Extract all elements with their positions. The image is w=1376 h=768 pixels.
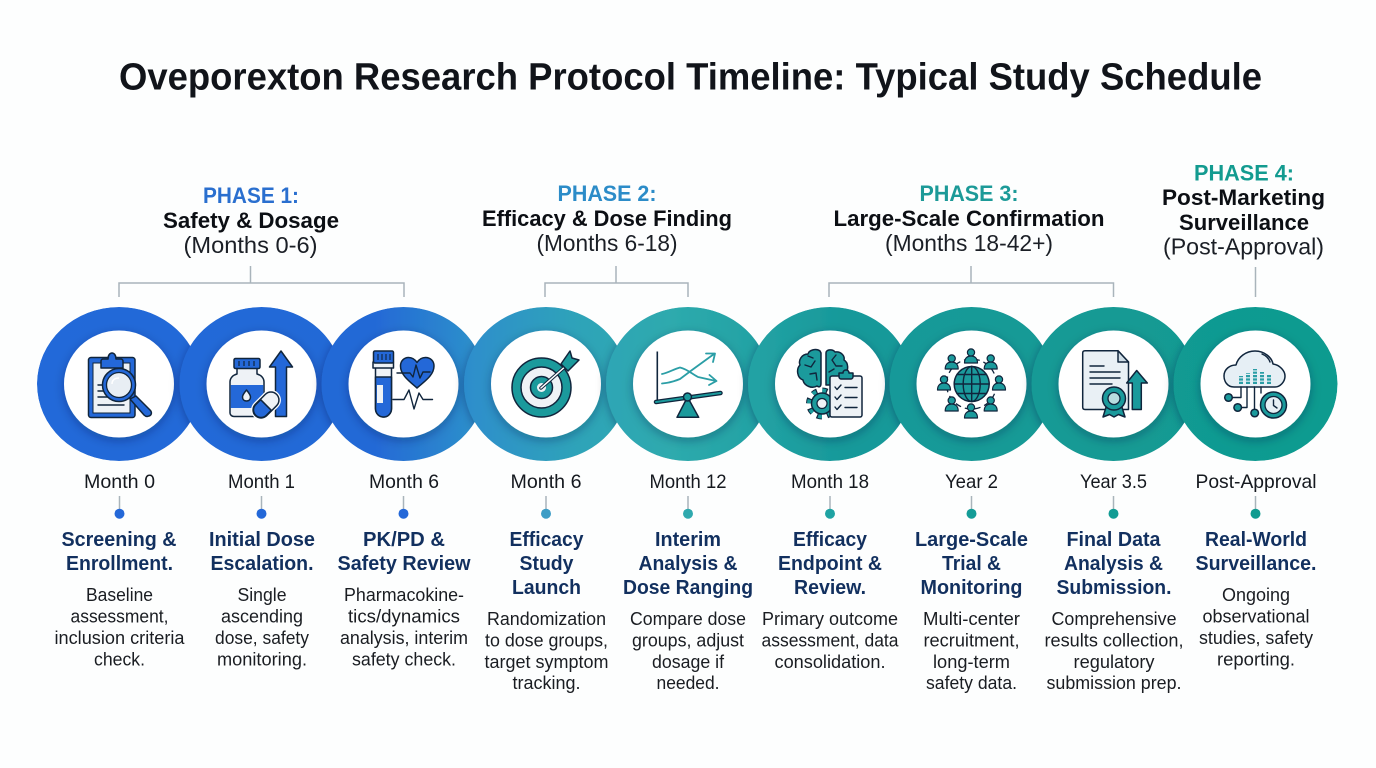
icon: globe with participants [938, 349, 1006, 418]
panel: phase 1 heading [163, 183, 339, 258]
step title: Efficacy [510, 529, 584, 551]
step description: reporting. [1217, 650, 1295, 670]
phase 2 name: Efficacy & Dose Finding [482, 206, 732, 231]
step title: Monitoring [920, 577, 1022, 599]
icon: brain, gear and checklist [798, 350, 862, 417]
step description [923, 609, 1020, 693]
step description: dose, safety [215, 628, 309, 648]
date: month 1: Month 1 [228, 471, 295, 493]
step description: studies, safety [1199, 628, 1313, 648]
step description: monitoring. [217, 650, 307, 670]
column: interim analysis and dose ranging [623, 471, 753, 693]
marker [966, 496, 976, 519]
phase 3 name: Large-Scale Confirmation [834, 206, 1104, 231]
step title: Safety Review [338, 553, 471, 575]
step description [762, 609, 899, 672]
marker [825, 496, 835, 519]
ring 4 [464, 307, 628, 461]
panel: phase 2 heading [482, 181, 732, 256]
step title: Escalation. [210, 553, 314, 575]
step title: Launch [512, 577, 581, 599]
step description: tracking. [512, 673, 580, 693]
step description [215, 585, 309, 670]
phase 4 name: Post-Marketing [1162, 185, 1325, 210]
step title [338, 529, 471, 575]
marker [1108, 496, 1118, 519]
step title: Analysis & [638, 553, 738, 575]
step title: Final Data [1066, 529, 1161, 551]
marker [114, 496, 124, 519]
step description: target symptom [484, 652, 608, 672]
step title: Trial & [942, 553, 1001, 575]
ring 2 [180, 307, 344, 461]
column: final data analysis and submission [1044, 471, 1184, 693]
connector: phase 4 [1254, 267, 1256, 297]
step description [630, 609, 746, 693]
step description: safety data. [926, 673, 1017, 693]
step description: Baseline [86, 585, 153, 605]
step title: Endpoint & [778, 553, 882, 575]
step description: recruitment, [924, 630, 1020, 650]
step description: Single [238, 585, 286, 605]
step title: Study [520, 553, 574, 575]
step title [915, 529, 1028, 599]
phase 4 name [1162, 185, 1325, 235]
step description: tics/dynamics [348, 606, 460, 626]
title: Oveporexton Research Protocol Timeline: Typical Study Schedule [119, 56, 1262, 98]
step title: Screening & [62, 529, 176, 551]
date: month 6: Month 6 [510, 471, 582, 493]
bracket: phase 1 [119, 266, 404, 297]
bracket: phase 3 [829, 266, 1114, 297]
ring 6 [748, 307, 912, 461]
phase 3 label: PHASE 3: [920, 181, 1018, 206]
step description: to dose groups, [485, 630, 608, 650]
date: year 2: Year 2 [945, 471, 998, 493]
step title [623, 529, 753, 599]
ring 3 [322, 307, 486, 461]
marker [398, 496, 408, 519]
step title: Enrollment. [66, 553, 173, 575]
phase 4 period: (Post-Approval) [1163, 234, 1324, 260]
step title: Real-World [1205, 529, 1307, 551]
step description: regulatory [1074, 652, 1154, 672]
step description: analysis, interim [340, 628, 468, 648]
step title: Analysis & [1064, 553, 1163, 575]
step description: check. [94, 650, 145, 670]
step description: Primary outcome [762, 609, 898, 629]
step description [484, 609, 608, 693]
step title: Interim [655, 529, 721, 551]
icon: chart on balance scale [656, 352, 720, 417]
step description: Ongoing [1222, 585, 1290, 605]
phase 3 period: (Months 18-42+) [885, 230, 1053, 256]
step description: submission prep. [1046, 673, 1182, 693]
step title: Surveillance. [1196, 553, 1316, 575]
step description: Comprehensive [1052, 609, 1176, 629]
step title: Dose Ranging [623, 577, 753, 599]
step title: Large-Scale [915, 529, 1028, 551]
date: year 3.5: Year 3.5 [1080, 471, 1147, 493]
step description: needed. [656, 673, 720, 693]
step title: Efficacy [793, 529, 868, 551]
step description: observational [1202, 606, 1310, 626]
step title: Review. [794, 577, 866, 599]
marker [683, 496, 693, 519]
step title [1196, 529, 1316, 575]
step title [778, 529, 882, 599]
phase 1 label: PHASE 1: [203, 183, 299, 208]
phase 4 label: PHASE 4: [1194, 160, 1294, 186]
step description: safety check. [352, 650, 456, 670]
step description: groups, adjust [632, 630, 744, 650]
icon: clipboard with magnifier [88, 353, 151, 418]
step title: Initial Dose [209, 529, 315, 551]
ring 9 [1174, 307, 1338, 461]
ring 5 [606, 307, 770, 461]
date: post-approval: Post-Approval [1196, 471, 1316, 493]
column: pk/pd and safety review [338, 471, 471, 670]
icon: medicine bottle, capsule and up arrow [230, 351, 292, 424]
bracket: phase 2 [545, 266, 688, 297]
column: efficacy study launch [484, 471, 608, 693]
marker [256, 496, 266, 519]
step title [510, 529, 584, 599]
step description [1044, 609, 1184, 693]
step title: Submission. [1056, 577, 1172, 599]
date: month 6: Month 6 [369, 471, 439, 493]
step description: dosage if [652, 652, 725, 672]
panel: phase 3 heading [834, 181, 1104, 256]
icon: target with arrow [512, 351, 579, 417]
date: month 0: Month 0 [84, 471, 155, 493]
step description [54, 585, 185, 670]
date: month 12: Month 12 [650, 471, 726, 493]
marker [1250, 496, 1260, 519]
icon: document, seal and up arrow [1083, 351, 1147, 417]
phase 4 name: Surveillance [1179, 210, 1309, 235]
phase 2 period: (Months 6-18) [536, 230, 678, 256]
column: large-scale trial and monitoring [915, 471, 1028, 693]
ring 7 [890, 307, 1054, 461]
step title: PK/PD & [363, 529, 445, 551]
step description: Multi-center [923, 609, 1020, 629]
column: efficacy endpoint and review [762, 471, 899, 672]
step description: ascending [221, 606, 303, 626]
panel: phase 4 heading [1162, 160, 1325, 260]
step description: long-term [933, 652, 1010, 672]
column: initial dose escalation [209, 471, 315, 670]
step title [209, 529, 315, 575]
step description: Pharmacokine- [344, 585, 464, 605]
step description: inclusion criteria [54, 628, 185, 648]
step description: assessment, data [762, 630, 899, 650]
column: real-world surveillance [1196, 471, 1316, 670]
step description: consolidation. [774, 652, 886, 672]
phase 1 period: (Months 0-6) [184, 232, 318, 258]
step description [1199, 585, 1313, 670]
phase 2 label: PHASE 2: [558, 181, 656, 206]
step description: assessment, [70, 606, 168, 626]
step title [1056, 529, 1172, 599]
step description: results collection, [1044, 630, 1184, 650]
step description: Randomization [487, 609, 606, 629]
phase 1 name: Safety & Dosage [163, 208, 339, 233]
step title [62, 529, 176, 575]
step description: Compare dose [630, 609, 746, 629]
ring 8 [1032, 307, 1196, 461]
column: screening and enrollment [54, 471, 185, 670]
marker [541, 496, 551, 519]
date: month 18: Month 18 [791, 471, 869, 493]
step description [340, 585, 468, 670]
icon: cloud data with clock [1224, 351, 1286, 418]
ring 1 [37, 307, 201, 461]
icon: test tube, heart and pulse [373, 351, 434, 417]
